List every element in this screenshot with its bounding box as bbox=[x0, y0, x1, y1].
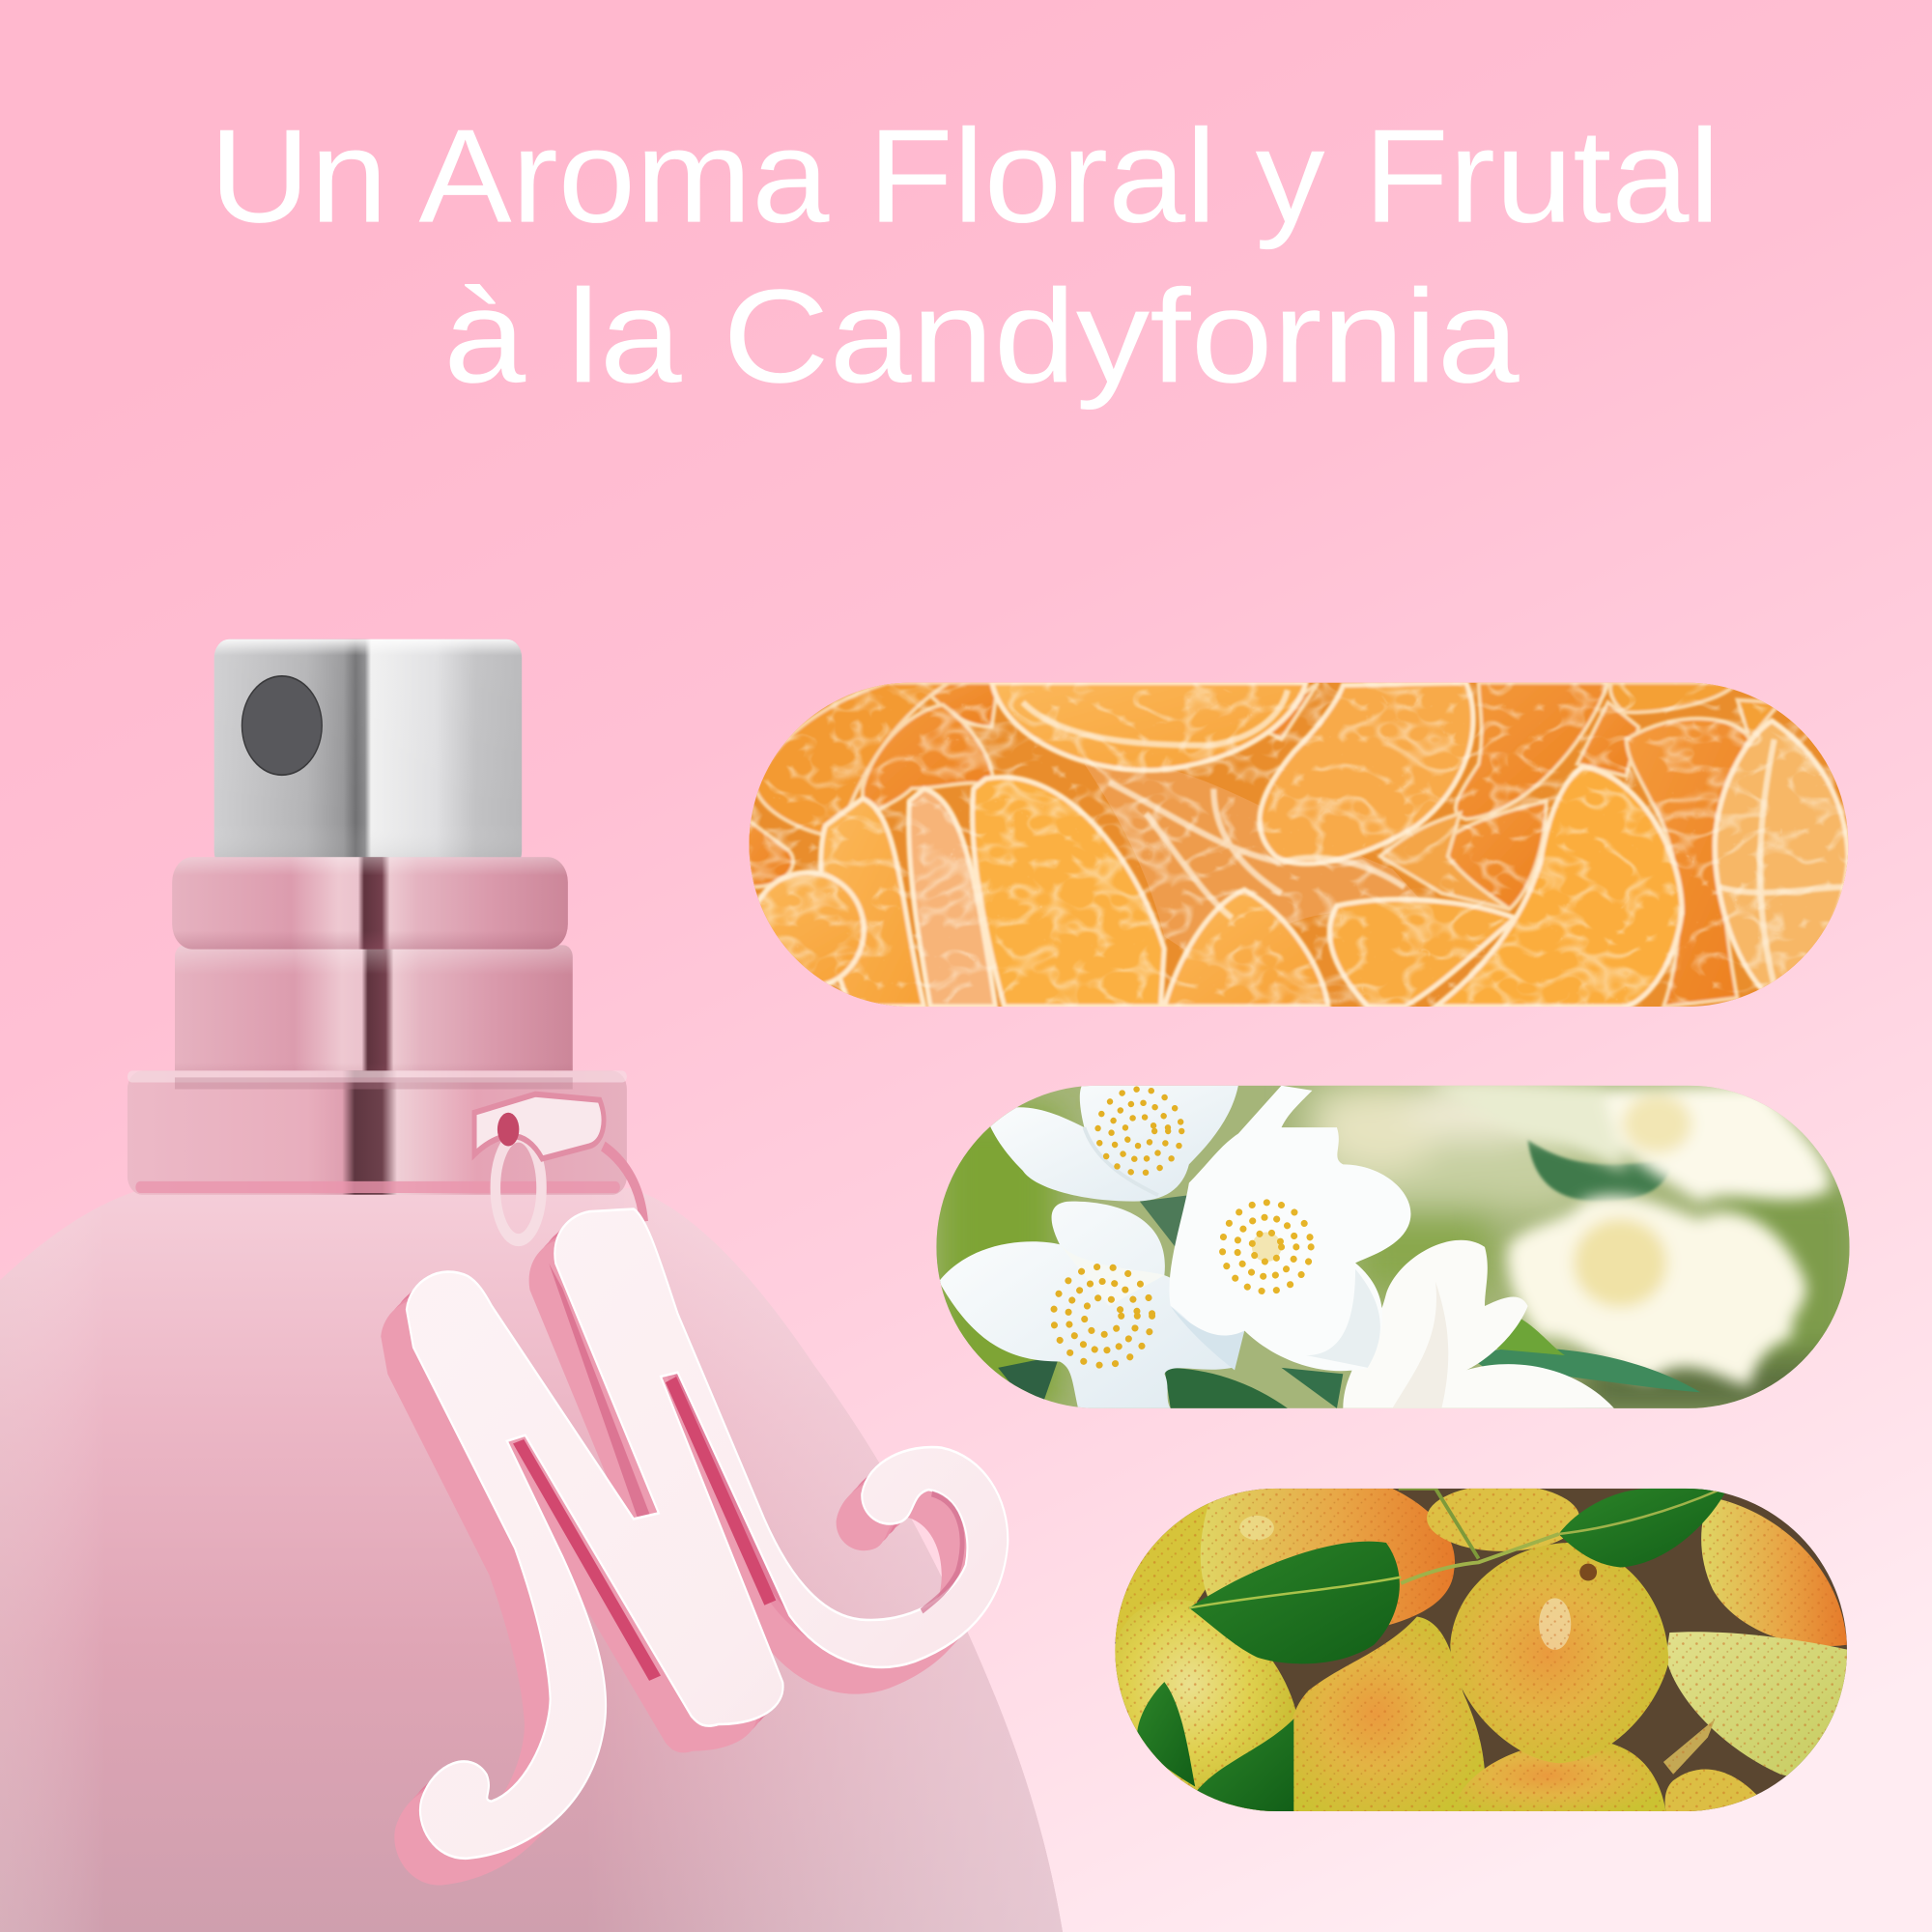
central peeled segment bbox=[1084, 763, 1418, 950]
pill: jasmine flowers bbox=[936, 1078, 1861, 1417]
flower left lower bbox=[939, 1202, 1233, 1408]
spray cap bbox=[214, 639, 522, 869]
bottle body bbox=[0, 1188, 1063, 1932]
flower lower right bbox=[1343, 1240, 1614, 1408]
peeled area membranes bbox=[1023, 690, 1844, 985]
flange ring bbox=[128, 1070, 627, 1195]
perfume bottle bbox=[0, 639, 1063, 1932]
pears bbox=[1079, 1475, 1855, 1811]
dark leaf bbox=[1528, 1140, 1673, 1202]
title line 2: à la Candyfornia bbox=[443, 262, 1520, 411]
charm ring bbox=[474, 1094, 643, 1240]
blurred background flowers bbox=[1430, 1086, 1830, 1386]
nozzle hole bbox=[242, 676, 322, 775]
title line 1: Un Aroma Floral y Frutal bbox=[210, 102, 1720, 251]
M charm bbox=[381, 1209, 1008, 1886]
stamens bbox=[1097, 1090, 1181, 1173]
stamens bbox=[1222, 1203, 1311, 1292]
citrus membrane texture bbox=[750, 683, 1848, 1007]
pill: pears bbox=[1079, 1475, 1855, 1811]
pill: mandarin segments bbox=[737, 683, 1848, 1007]
charm front face bbox=[407, 1209, 1008, 1859]
blurred foliage background bbox=[936, 1078, 1861, 1417]
foreground leaves bbox=[998, 1195, 1700, 1408]
pear speckles bbox=[1115, 1489, 1847, 1811]
collar bbox=[172, 857, 573, 1092]
charm slit shadows bbox=[513, 1264, 776, 1681]
flower centre bbox=[1169, 1086, 1410, 1371]
leaves bbox=[1137, 1489, 1727, 1811]
stamens bbox=[1054, 1266, 1152, 1365]
charm extrusion bbox=[381, 1215, 1001, 1886]
pear stem bbox=[1579, 1564, 1597, 1580]
title bbox=[210, 102, 1720, 411]
spiral detail bbox=[922, 1493, 962, 1611]
segments bbox=[737, 683, 1848, 1007]
flower top bbox=[985, 1086, 1238, 1202]
